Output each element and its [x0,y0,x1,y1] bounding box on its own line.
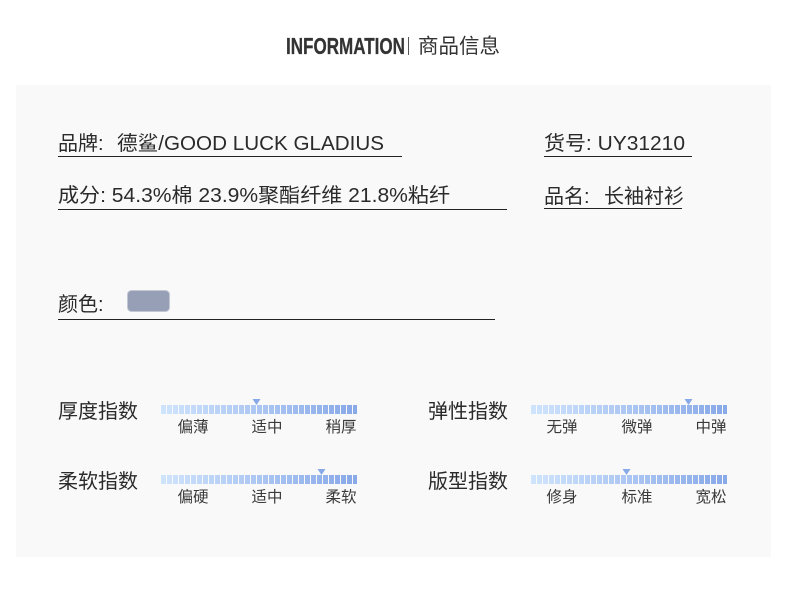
index: softness: 偏硬 [177,488,209,506]
index: elasticity: 弹性指数 [428,400,508,423]
field: colour [58,290,495,320]
colour swatch [128,290,170,312]
field: product name: 品名: [544,185,590,208]
index: thickness: 适中 [251,418,283,436]
index: softness: 柔软 [325,488,357,506]
field: colour: 颜色: [58,293,104,316]
title: 商品信息 [418,35,500,58]
index: thickness [58,399,357,436]
index: softness: 适中 [251,488,283,506]
index: softness: 柔软指数 [58,470,138,493]
field: item number: 货号: UY31210 [544,132,685,155]
index: elasticity [428,399,727,436]
index: elasticity: 中弹 [695,418,727,436]
index: fit: 标准 [621,488,653,506]
index: fit [428,469,727,506]
title: INFORMATION [286,33,405,59]
index: elasticity: 无弹 [546,418,578,436]
index: thickness: 偏薄 [177,418,209,436]
index: fit: 修身 [546,488,578,506]
field: product name: 长袖衬衫 [604,185,684,208]
index: fit: 版型指数 [428,470,508,493]
index: thickness: 稍厚 [325,418,357,436]
field: brand: 品牌: [58,132,104,155]
field: brand: 德鲨/GOOD LUCK GLADIUS [117,132,384,155]
panel: product information [16,85,771,557]
index: softness [58,469,357,506]
field: product name [544,185,684,209]
field: composition: 成分: 54.3%棉 23.9%聚酯纤维 21.8%粘纤 [58,184,450,207]
index: thickness: 厚度指数 [58,400,138,423]
field: brand [58,132,402,157]
index: fit: 宽松 [695,488,727,506]
index: elasticity: 微弹 [621,418,653,436]
